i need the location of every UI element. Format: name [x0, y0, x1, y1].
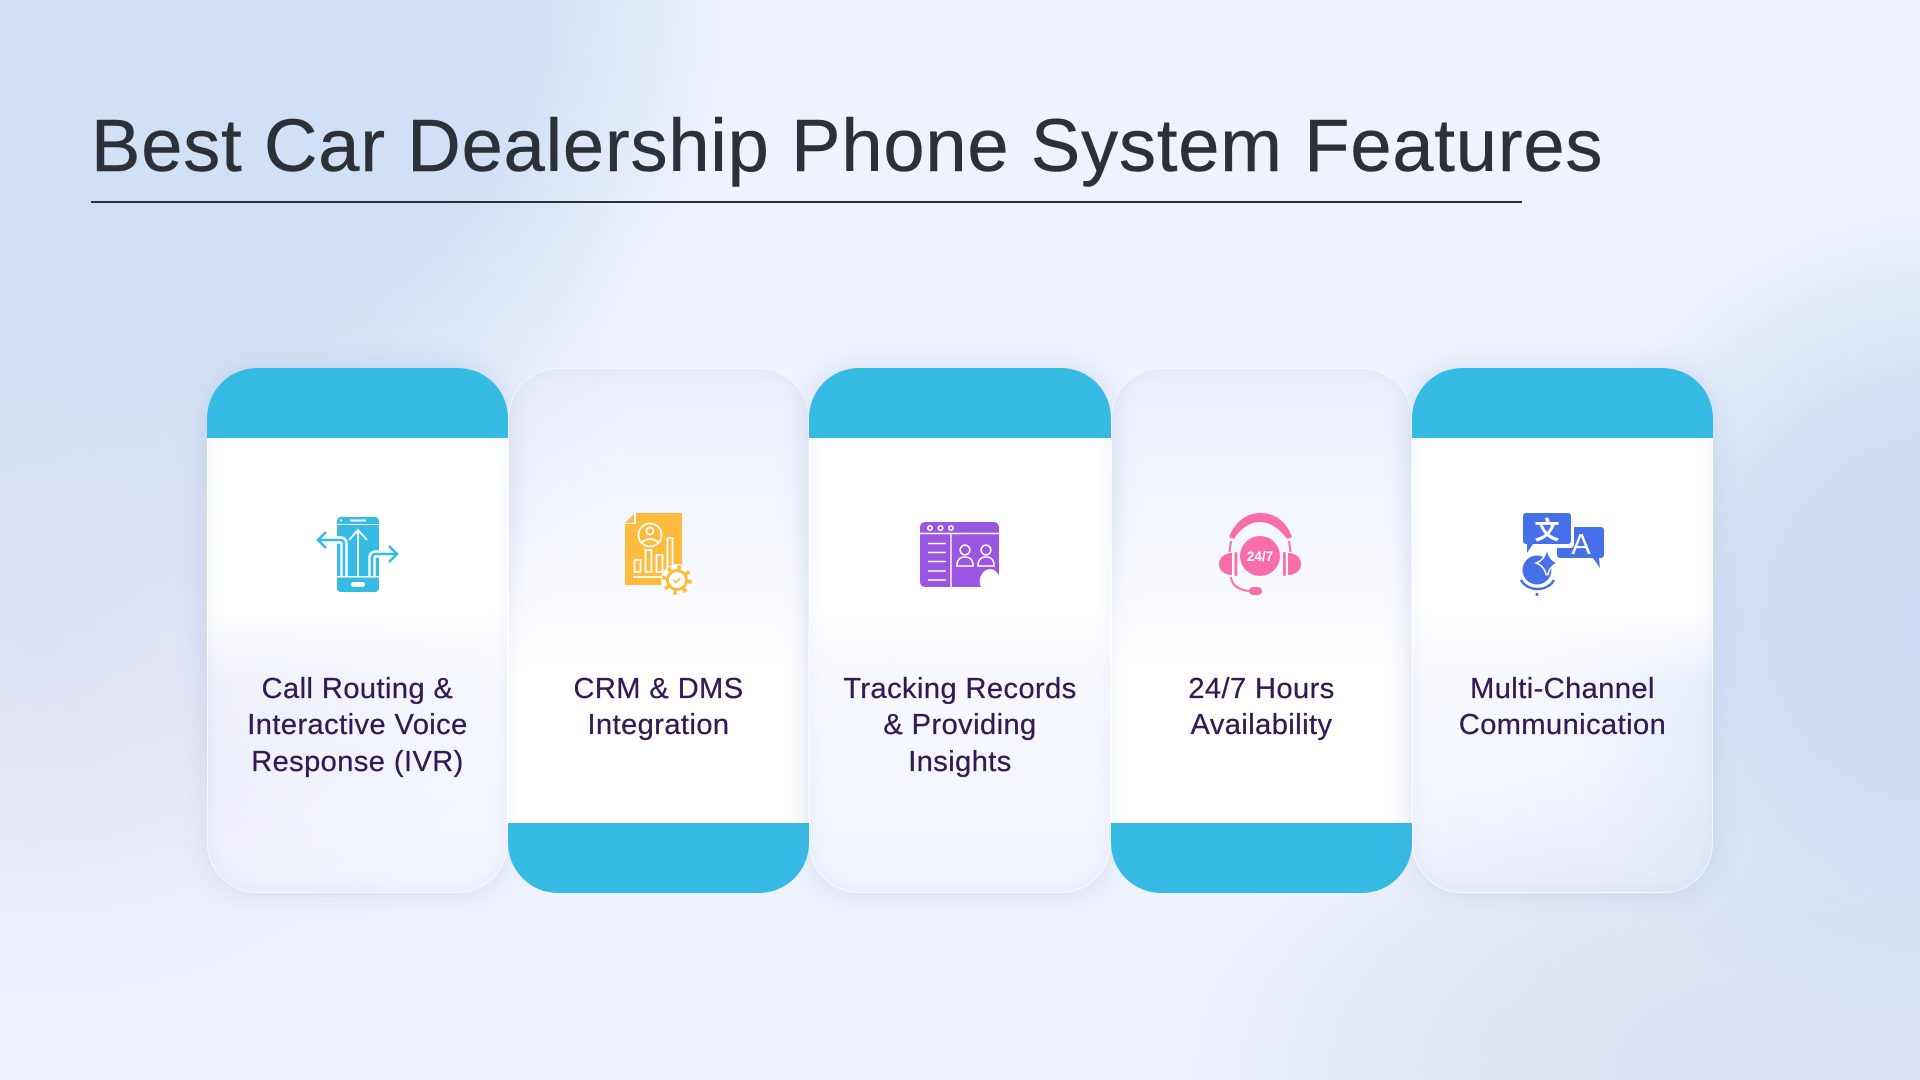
label: [574, 673, 744, 741]
label: [1188, 673, 1335, 741]
icon: browser window with users: [920, 522, 999, 587]
label: & Providing: [883, 709, 1037, 741]
label: [247, 673, 468, 778]
label: [843, 673, 1077, 778]
label: Availability: [1191, 709, 1332, 741]
label: [1459, 673, 1666, 741]
panel: multi-channel card: [1412, 368, 1713, 893]
panel: availability card: [1111, 369, 1412, 893]
label: Interactive Voice: [247, 709, 468, 741]
panel: call routing card: [207, 368, 508, 893]
label: Call Routing &: [262, 673, 453, 705]
label: Insights: [908, 746, 1012, 778]
label: Integration: [588, 709, 730, 741]
label: 24/7 Hours: [1188, 673, 1335, 705]
icon: translation bubbles and globe: [1520, 513, 1604, 596]
panel: CRM and DMS card: [508, 368, 809, 893]
title: Best Car Dealership Phone System Features: [91, 104, 1603, 187]
label: CRM & DMS: [574, 673, 744, 705]
panel: tracking records card: [809, 368, 1111, 893]
icon: 24/7 headset: [1219, 513, 1301, 595]
label: Communication: [1459, 709, 1666, 741]
label: Tracking Records: [843, 673, 1077, 705]
label: Response (IVR): [251, 746, 464, 778]
icon: translation bubbles and globe: A: [1571, 529, 1591, 561]
label: Multi-Channel: [1470, 673, 1655, 705]
icon: 24/7 headset: 24/7: [1247, 549, 1273, 564]
icon: translation bubbles and globe: 文: [1534, 517, 1560, 545]
icon: report with gear: [625, 513, 692, 595]
icon: phone with routing arrows: [316, 517, 399, 592]
